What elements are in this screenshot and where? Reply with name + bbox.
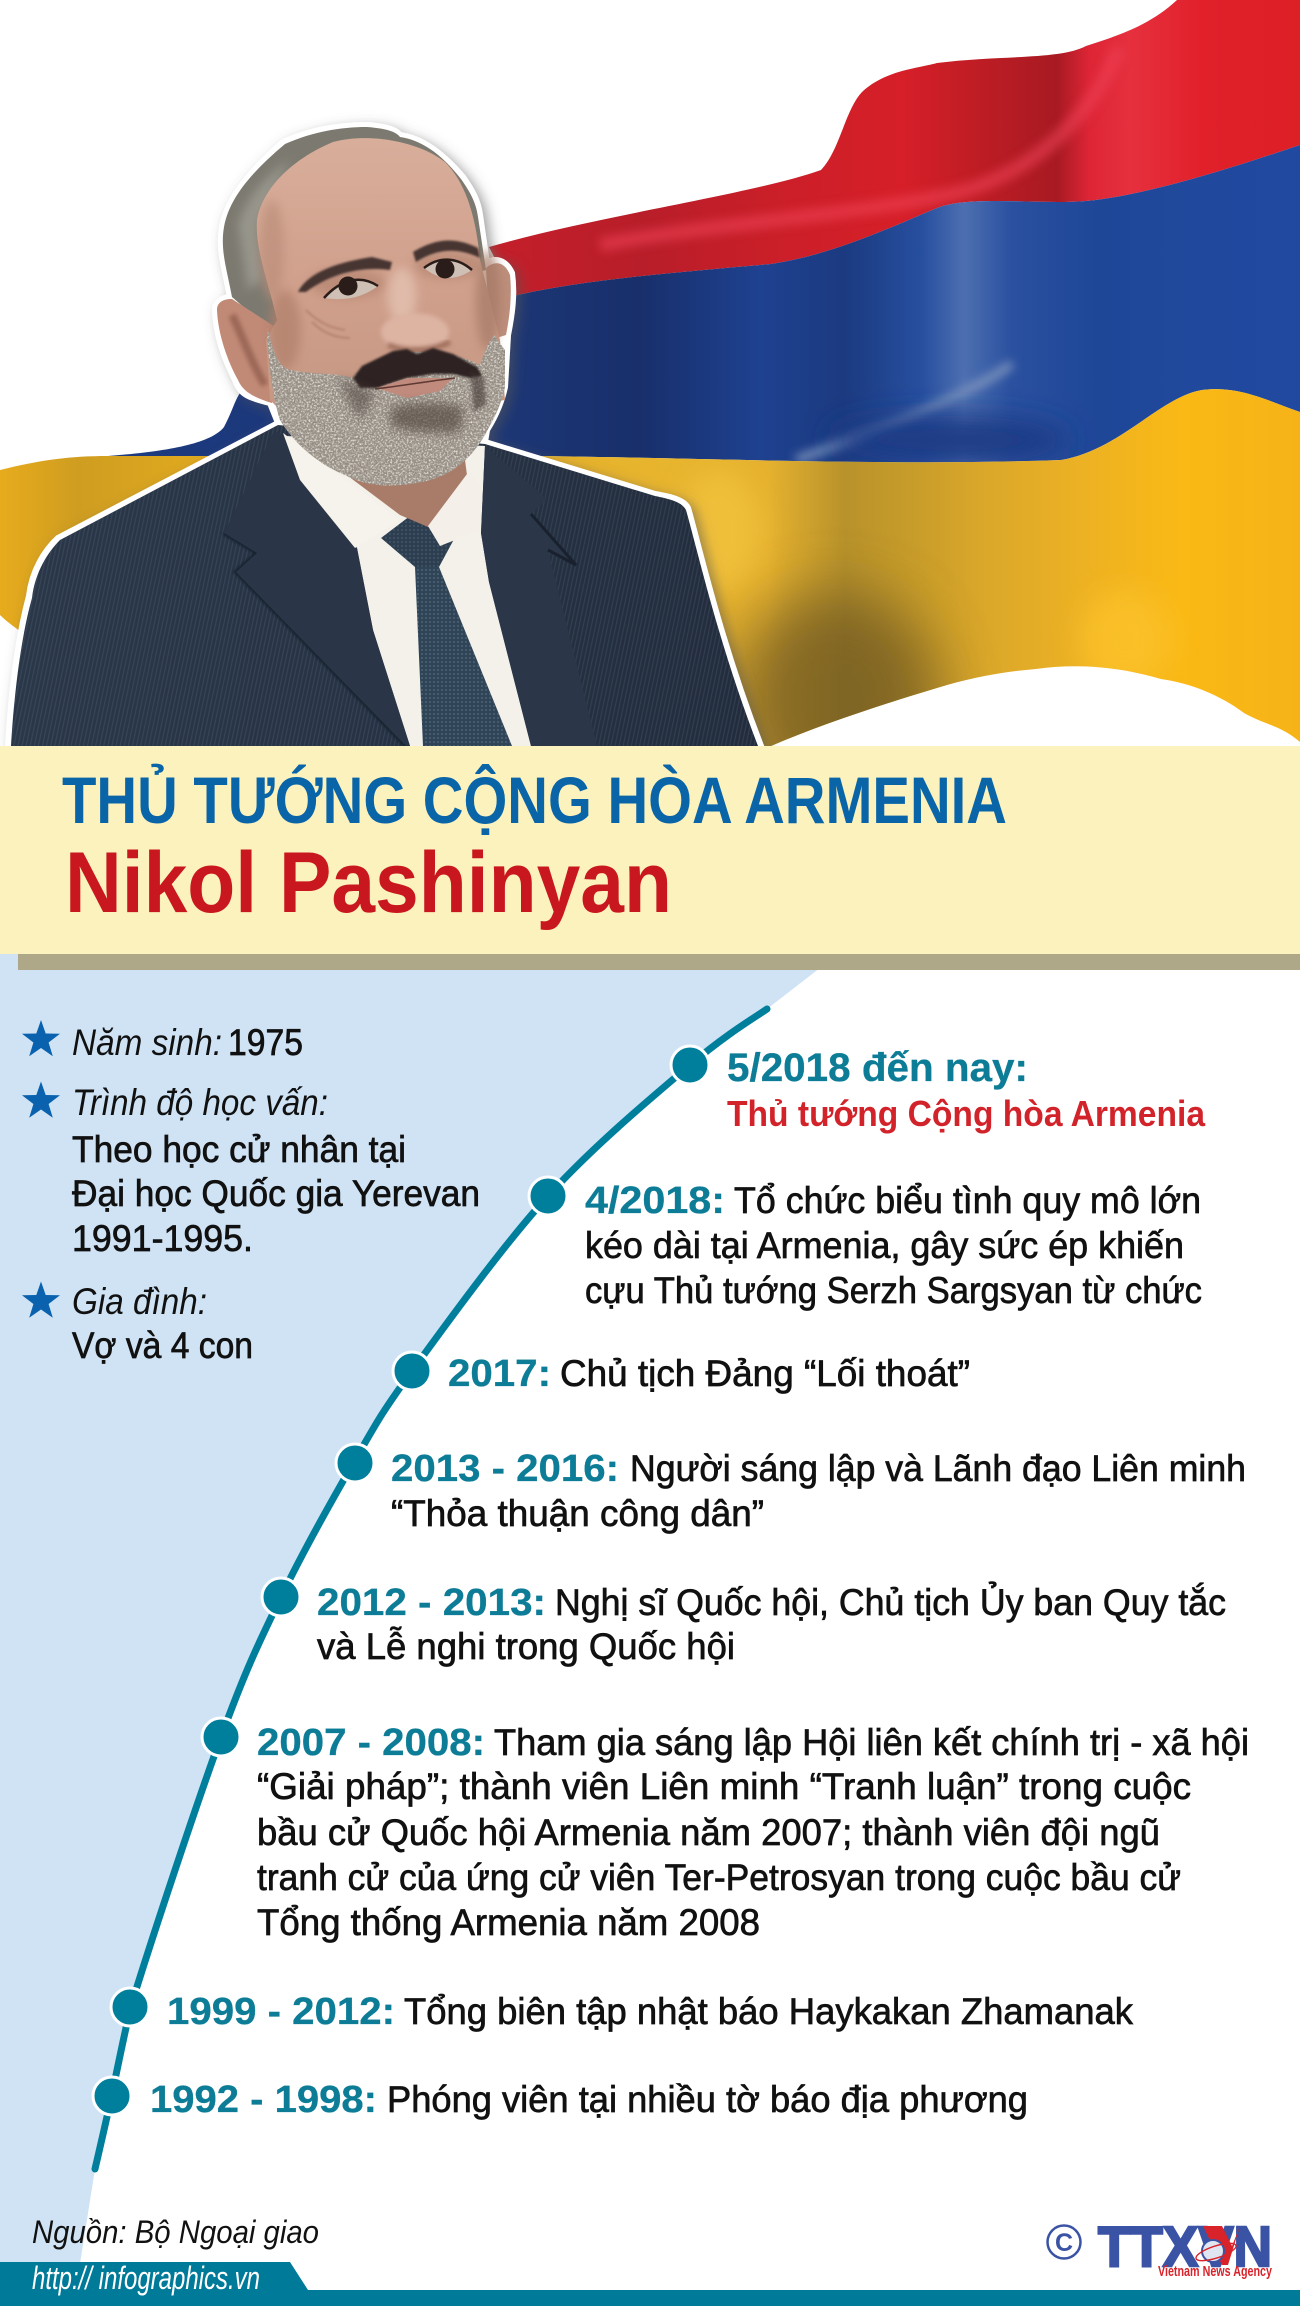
flag: blue stripe xyxy=(100,140,1300,470)
portrait of Nikol Pashinyan xyxy=(8,125,761,746)
education: Theo học cử nhân tại xyxy=(72,1129,406,1170)
timeline: 2013-2016 xyxy=(336,1444,1246,1534)
eyebrows xyxy=(298,257,392,292)
education: Đại học Quốc gia Yerevan xyxy=(72,1173,480,1214)
timeline: 2017: Chủ tịch Đảng “Lối thoát” xyxy=(560,1353,970,1394)
timeline: 2007-2008 xyxy=(202,1718,1249,1943)
family xyxy=(22,1281,253,1366)
face skin xyxy=(257,138,505,430)
head xyxy=(217,127,511,548)
nose xyxy=(388,268,416,324)
eyes xyxy=(324,280,378,299)
timeline: 2017 xyxy=(393,1352,970,1395)
timeline: 1999-2012 xyxy=(111,1988,1133,2033)
timeline: 2012-2013: và Lễ nghi trong Quốc hội xyxy=(317,1626,735,1667)
birth year: 1975 xyxy=(228,1022,303,1063)
timeline: 4/2018: 4/2018: xyxy=(585,1180,725,1222)
eye sockets xyxy=(310,268,386,298)
cheek wrinkles xyxy=(306,310,350,338)
beard xyxy=(267,327,505,486)
timeline: 2013-2016: “Thỏa thuận công dân” xyxy=(391,1493,764,1534)
copyright symbol: C xyxy=(1055,2229,1073,2257)
timeline: 2007-2008: Tham gia sáng lập Hội liên kết chính trị - xã hội xyxy=(494,1722,1249,1763)
timeline: 5/2018: 5/2018 đến nay: xyxy=(727,1046,1028,1090)
portrait outline xyxy=(8,125,761,746)
ears xyxy=(217,299,280,403)
name: Nikol Pashinyan xyxy=(65,835,672,931)
birth year xyxy=(22,1020,303,1063)
moustache xyxy=(353,348,482,388)
timeline: 2007-2008: Tổng thống Armenia năm 2008 xyxy=(257,1902,760,1943)
timeline: 2017: 2017: xyxy=(448,1353,551,1395)
timeline: 1999-2012: 1999 - 2012: xyxy=(167,1991,395,2033)
flag: red stripe xyxy=(480,0,1300,300)
white shirt xyxy=(286,436,531,746)
timeline: 2013-2016: 2013 - 2016: xyxy=(391,1448,619,1490)
timeline: 5/2018 xyxy=(671,1046,1206,1134)
suit jacket xyxy=(11,425,758,746)
copyright symbol xyxy=(1048,2226,1080,2258)
tie xyxy=(381,516,512,746)
timeline: 4/2018 xyxy=(529,1177,1202,1311)
timeline: 2007-2008: 2007 - 2008: xyxy=(257,1722,485,1764)
timeline: 4/2018: cựu Thủ tướng Serzh Sargsyan từ chức xyxy=(585,1270,1202,1311)
timeline: 1992-1998: Phóng viên tại nhiều tờ báo địa phương xyxy=(387,2079,1028,2120)
red V and globe xyxy=(1194,2226,1240,2265)
personal info panel xyxy=(22,1020,480,1366)
flag: yellow stripe xyxy=(0,389,1300,746)
title: THỦ TƯỚNG CỘNG HÒA ARMENIA xyxy=(62,763,1007,837)
family: Gia đình: xyxy=(72,1281,207,1322)
timeline: 1992-1998: 1992 - 1998: xyxy=(150,2079,377,2121)
timeline: 2007-2008: bầu cử Quốc hội Armenia năm 2007; thành viên đội ngũ xyxy=(257,1812,1160,1853)
mouth xyxy=(377,378,453,398)
family: Vợ và 4 con xyxy=(72,1325,253,1366)
website url: http:// infographics.vn xyxy=(32,2260,260,2296)
birth year: Năm sinh: xyxy=(72,1022,222,1063)
timeline: 2013-2016: Người sáng lập và Lãnh đạo Liên minh xyxy=(630,1448,1246,1489)
education: 1991-1995. xyxy=(72,1218,253,1259)
timeline: 2012-2013: Nghị sĩ Quốc hội, Chủ tịch Ủy ban Quy tắc xyxy=(555,1581,1226,1623)
timeline: 2012-2013 xyxy=(262,1578,1226,1667)
timeline: 4/2018: Tổ chức biểu tình quy mô lớn xyxy=(734,1180,1201,1221)
light-blue sidebar background xyxy=(0,954,838,2270)
header banner xyxy=(0,746,1300,970)
timeline: 4/2018: kéo dài tại Armenia, gây sức ép khiến xyxy=(585,1225,1184,1266)
timeline: 2007-2008: tranh cử của ứng cử viên Ter-Petrosyan trong cuộc bầu cử xyxy=(257,1857,1181,1898)
education: Trình độ học vấn: xyxy=(72,1082,328,1123)
hair xyxy=(223,127,486,330)
wordmark: TTXVN xyxy=(1098,2215,1272,2279)
timeline: 1992-1998 xyxy=(93,2077,1028,2121)
chin shadow xyxy=(390,403,464,433)
source credit: Nguồn: Bộ Ngoại giao xyxy=(32,2214,319,2250)
timeline: 2012-2013: 2012 - 2013: xyxy=(317,1582,546,1624)
timeline: 1999-2012: Tổng biên tập nhật báo Haykakan Zhamanak xyxy=(404,1991,1133,2032)
footer bar xyxy=(0,2260,1300,2306)
TTXVN logo xyxy=(1048,2215,1272,2280)
timeline: 2007-2008: “Giải pháp”; thành viên Liên minh “Tranh luận” trong cuộc xyxy=(257,1766,1191,1807)
neck xyxy=(340,460,470,530)
jacket lapels xyxy=(224,431,597,746)
timeline: 5/2018: Thủ tướng Cộng hòa Armenia xyxy=(727,1093,1206,1134)
flag of Armenia xyxy=(0,0,1300,810)
education xyxy=(22,1082,480,1259)
timeline line xyxy=(95,1009,767,2169)
